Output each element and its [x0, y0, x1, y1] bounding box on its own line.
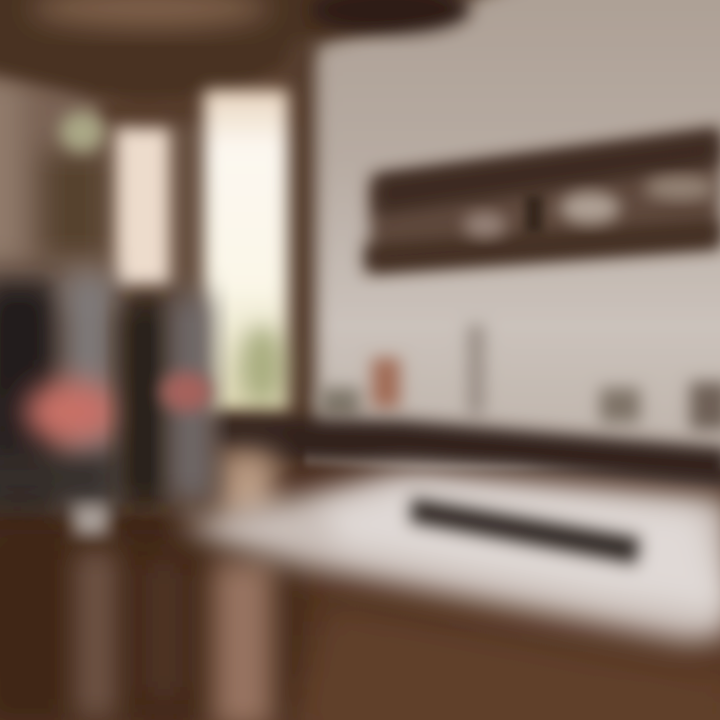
bottle: left: [0, 275, 120, 535]
window: small left: [116, 128, 170, 286]
window: large bright: [204, 90, 288, 412]
ceiling: [0, 0, 520, 110]
bottle: right: [124, 295, 212, 505]
window frame columns: [100, 40, 316, 440]
wooden floor: [0, 462, 720, 720]
floor reflections: [75, 452, 274, 720]
dark bar on mat: [410, 498, 640, 564]
white mat: [175, 472, 720, 642]
countertop items: [320, 325, 720, 430]
wall: left side: [0, 60, 120, 310]
ceiling lamp glow: [60, 112, 104, 152]
wall shelves: [365, 128, 720, 272]
counter edge: [215, 416, 720, 495]
